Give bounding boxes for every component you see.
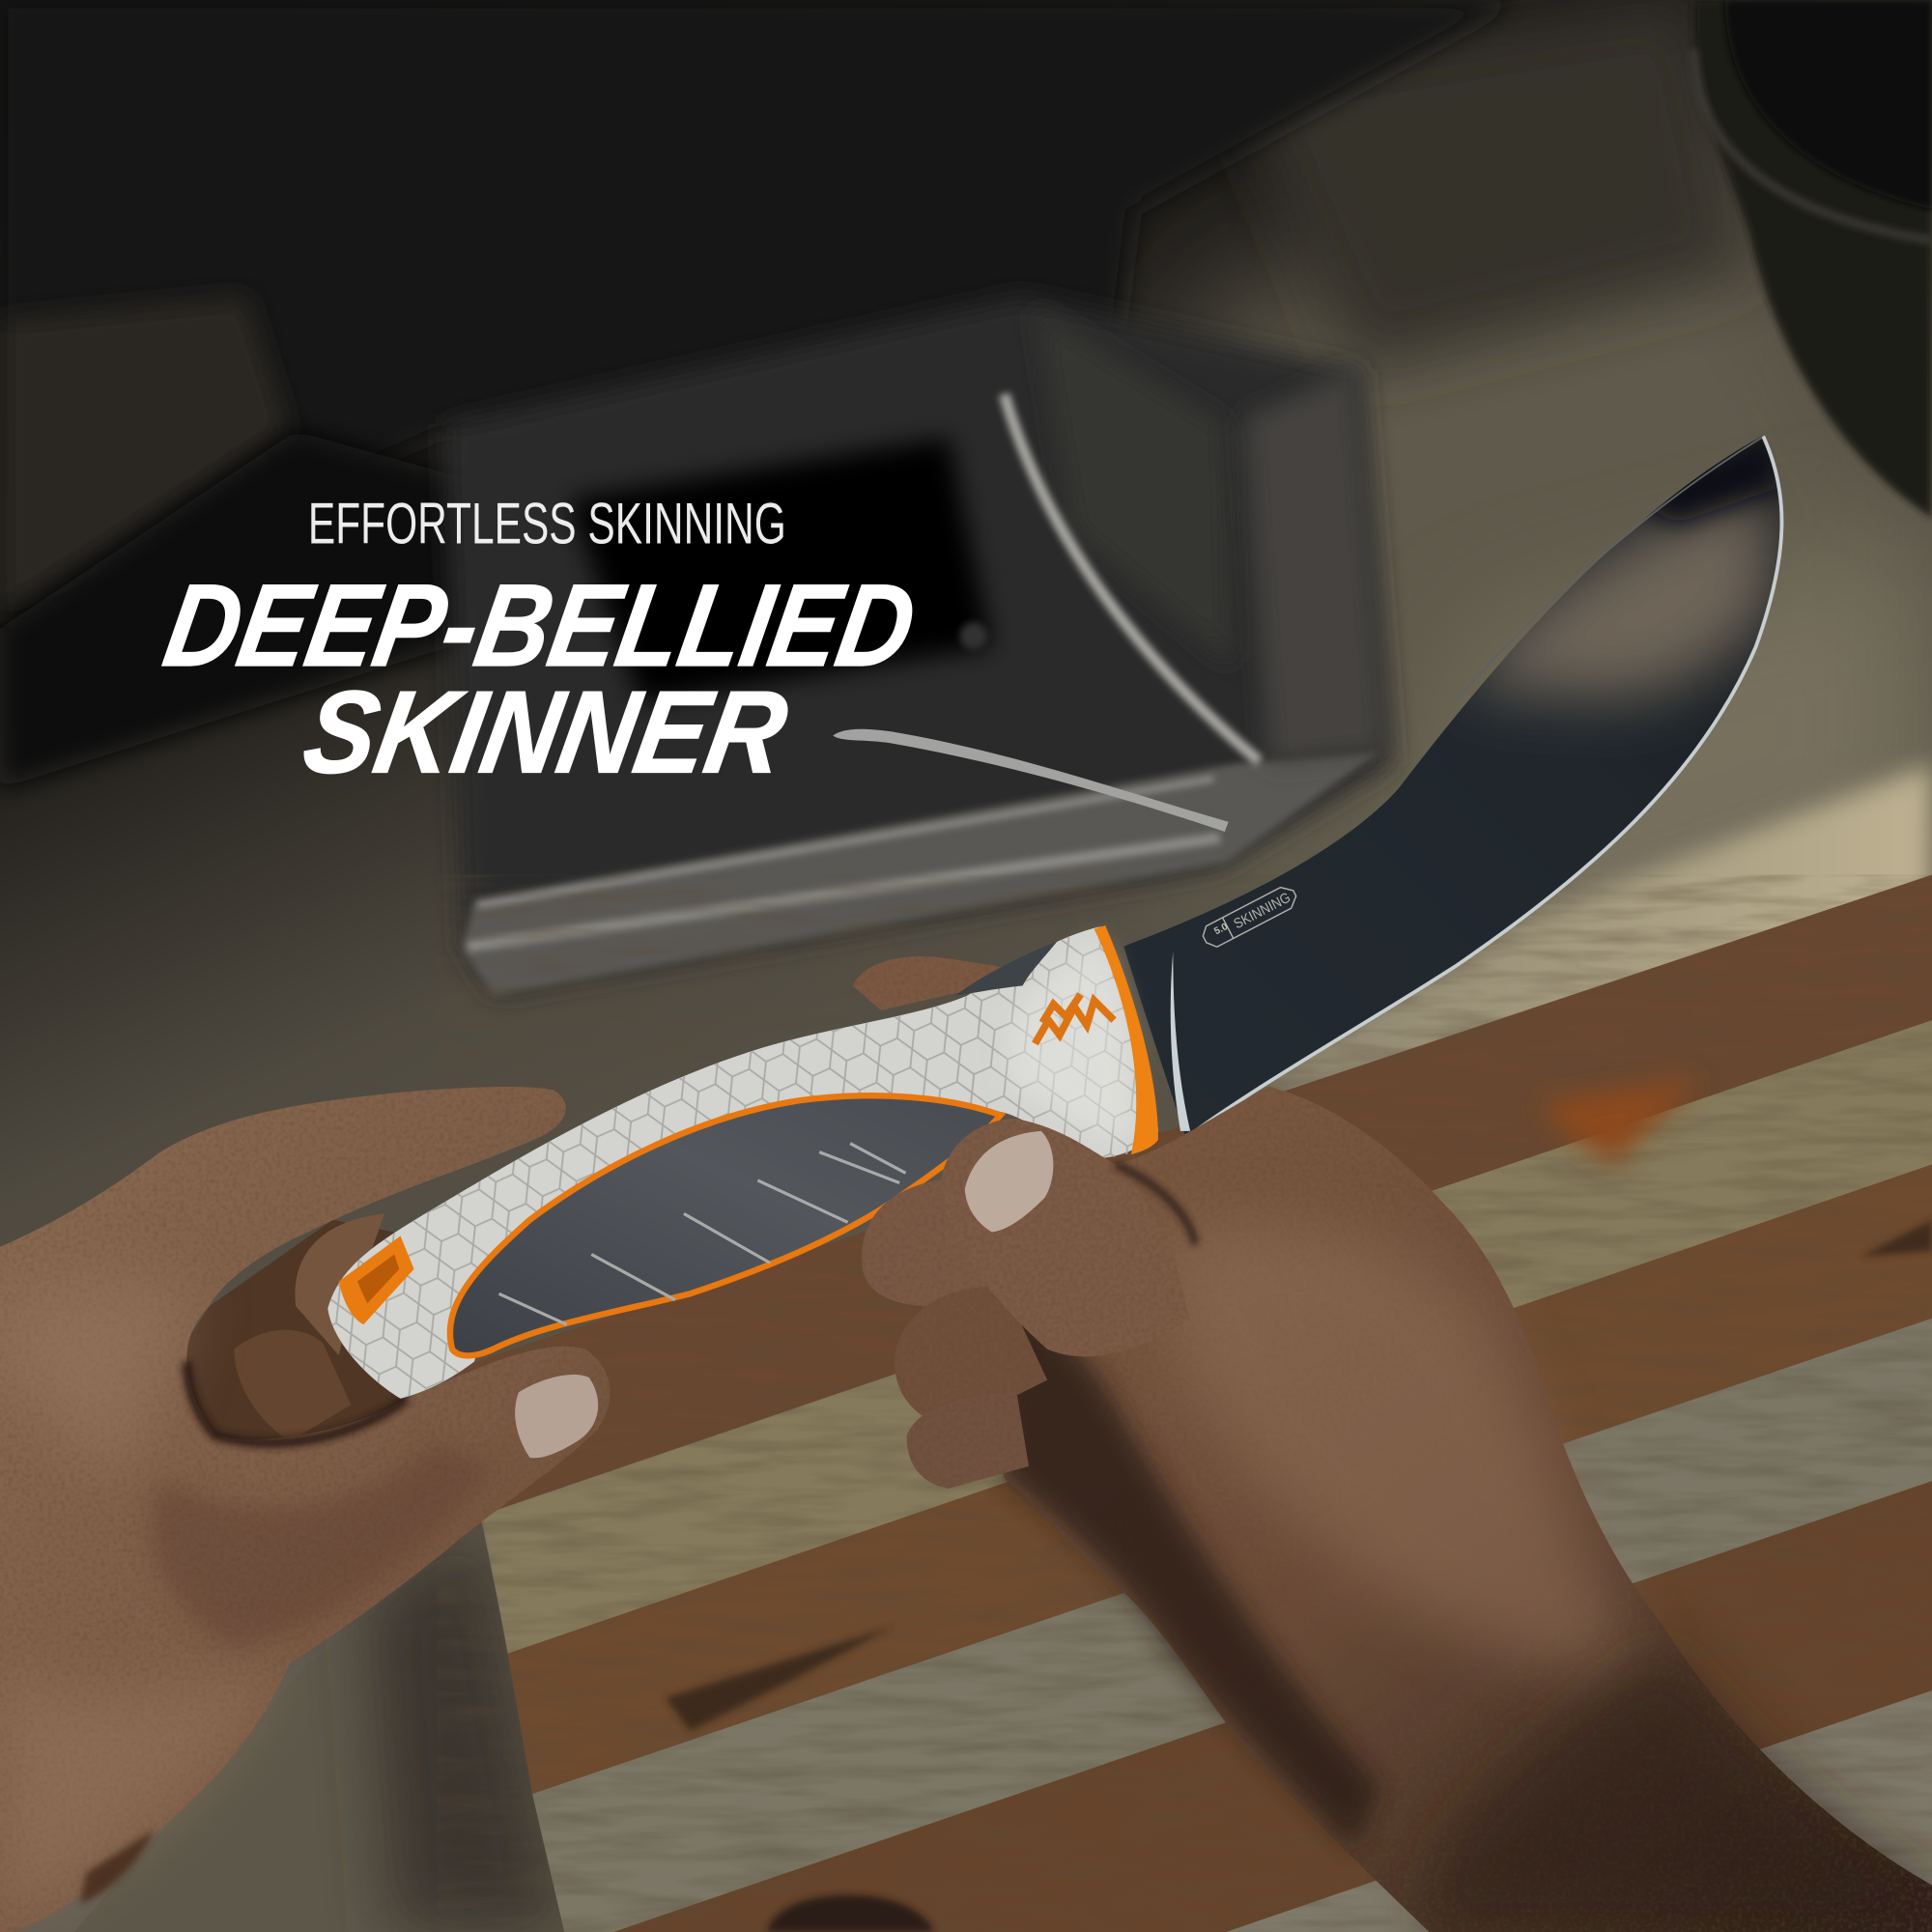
blade badge: [1200, 883, 1300, 951]
right hand: [862, 1087, 1932, 1932]
upper rear finger: [853, 956, 1005, 1010]
dark upper machinery: [0, 0, 1516, 629]
mountain logo: [1035, 994, 1114, 1043]
blade badge: 5.0: [1212, 922, 1230, 937]
blade edge bevel: [1195, 437, 1781, 1131]
white overmold: [327, 926, 1158, 1399]
grey rubber grip: [450, 1095, 1001, 1355]
lit floor upper right: [1109, 148, 1932, 1096]
lit floor strip before rug: [1233, 764, 1932, 1103]
pointer brush stroke: [833, 729, 1229, 832]
knife handle: [327, 925, 1158, 1399]
highlight on overmold: [1010, 943, 1132, 1140]
concrete floor lower left: [74, 1528, 564, 1932]
blade plunge line: [1171, 952, 1190, 1131]
dark top wedge: [955, 941, 1057, 996]
ring finger: [907, 1392, 1029, 1489]
wrist shadow: [1429, 1638, 1932, 1932]
headline line 1: DEEP-BELLIED: [156, 559, 924, 691]
fingers behind handle: [160, 1220, 407, 1454]
left hand: [0, 1087, 611, 1932]
headline: [156, 559, 924, 798]
palm underside shadow: [985, 1282, 1380, 1848]
thumb nail, left: [515, 1375, 598, 1458]
back of hand and wrist: [974, 1087, 1932, 1932]
blade reflection: [1466, 487, 1775, 698]
thumb: [941, 1119, 1189, 1356]
object at bottom edge: [766, 1895, 934, 1932]
lit back of hand: [1163, 1223, 1651, 1677]
thumb nail, right: [965, 1131, 1053, 1233]
index finger behind thumb: [862, 1177, 1060, 1312]
finger crease shadow: [1115, 1164, 1195, 1244]
middle finger: [895, 1287, 1047, 1417]
blade badge: SKINNING: [1232, 891, 1293, 932]
sharpener base unit: [443, 296, 1392, 996]
orange lanyard slot: [339, 1236, 414, 1324]
striped wooden rug: [438, 875, 1932, 1932]
cooking pot, upper right: [1693, 0, 1932, 518]
honeycomb texture: [327, 926, 1140, 1399]
palm and thumb: [0, 1087, 611, 1932]
grip ridges: [499, 1144, 906, 1324]
hand shading: [151, 1441, 493, 1651]
orange collar: [1094, 925, 1158, 1154]
headline line 2: SKINNER: [295, 667, 796, 798]
eyebrow text: EFFORTLESS SKINNING: [308, 492, 786, 556]
knife blade: [1123, 431, 1781, 1136]
